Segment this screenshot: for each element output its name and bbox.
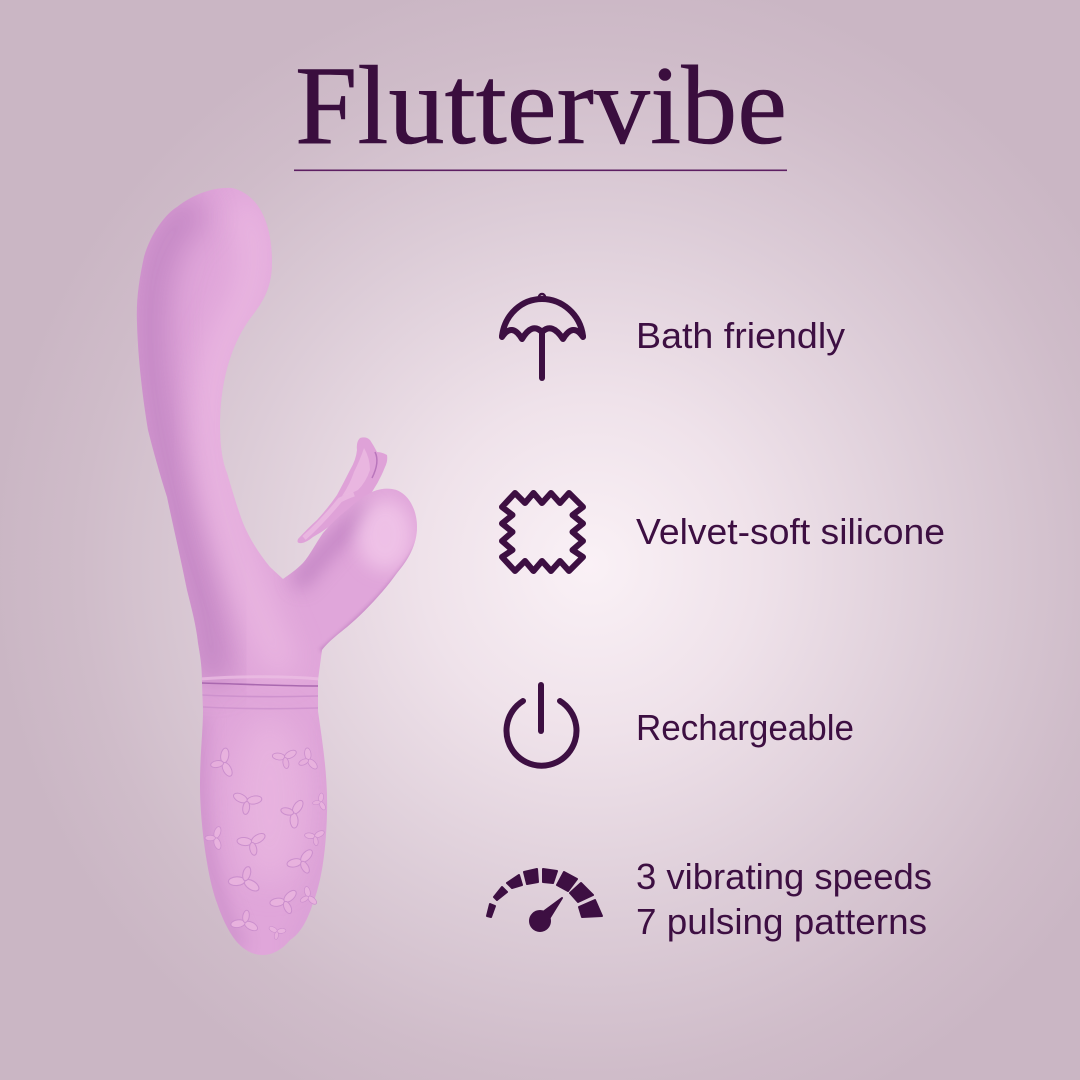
collar band xyxy=(200,677,320,679)
icon: umbrella xyxy=(502,296,583,378)
feature row: velvet-soft silicone xyxy=(502,493,945,571)
device body xyxy=(137,188,417,955)
label: Velvet-soft silicone xyxy=(636,511,945,552)
label: speeds: 3 vibrating speeds xyxy=(636,856,932,897)
body shading xyxy=(150,205,420,950)
butterfly xyxy=(298,437,387,543)
label: Bath friendly xyxy=(636,315,845,356)
embossed leaf pattern xyxy=(205,746,327,941)
icon: fabric swatch xyxy=(502,493,583,571)
label: Rechargeable xyxy=(636,707,854,748)
feature row: speeds and patterns xyxy=(487,856,932,942)
icon: power symbol xyxy=(506,685,576,766)
feature row: rechargeable xyxy=(506,685,854,766)
title: Fluttervibe xyxy=(295,44,787,168)
icon: speedometer xyxy=(487,869,602,931)
feature row: bath friendly xyxy=(502,296,845,378)
product image: pink silicone device xyxy=(137,188,420,955)
label: patterns: 7 pulsing patterns xyxy=(636,901,927,942)
